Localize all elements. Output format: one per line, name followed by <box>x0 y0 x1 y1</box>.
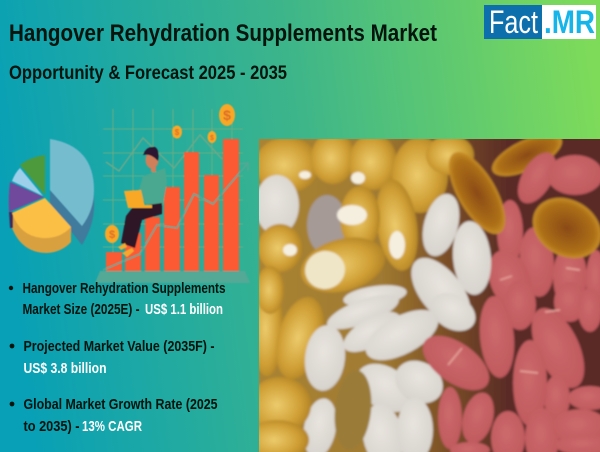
platform <box>95 271 250 283</box>
pie chart illustration <box>9 139 94 253</box>
coins <box>105 104 235 243</box>
growth bar chart illustration: $ <box>223 107 231 123</box>
bullet: growth rate: to 2035) - <box>24 418 80 435</box>
subtitle: Opportunity & Forecast 2025 - 2035 <box>9 62 287 84</box>
bullet: market size: Hangover Rehydration Supplements <box>22 280 226 297</box>
bullet: market size: Market Size (2025E) - <box>22 301 140 318</box>
photo of capsules and tablets <box>245 125 600 452</box>
growth bar chart illustration <box>95 104 250 283</box>
growth bar chart illustration: $ <box>175 128 180 137</box>
bullet: projected value: Projected Market Value (2035F) - <box>24 338 215 355</box>
bullet: growth rate: 13% CAGR <box>82 418 142 435</box>
red tablets, upper <box>488 151 600 304</box>
bullet: projected value <box>10 338 215 377</box>
chart grid <box>103 109 243 270</box>
red tablets, lower <box>413 280 600 452</box>
gold capsules, lower <box>259 376 312 452</box>
bars <box>106 139 239 271</box>
bullet: growth rate <box>10 396 217 435</box>
logo: Fact.MR: Fact <box>489 4 538 40</box>
gold capsules, top <box>255 132 474 213</box>
bullet: projected value: US$ 3.8 billion <box>24 360 106 377</box>
gold capsules, middle <box>259 180 419 379</box>
bullet: market size <box>9 280 225 318</box>
logo: Fact.MR <box>484 4 596 40</box>
growth bar chart illustration: $ <box>109 229 115 241</box>
person with laptop <box>118 147 167 257</box>
title: Hangover Rehydration Supplements Market <box>9 20 437 47</box>
growth arrow <box>103 163 248 270</box>
growth bar chart illustration: $ <box>210 135 214 142</box>
bullet list <box>9 280 225 435</box>
white tablets, lower <box>302 298 445 452</box>
zigzag line <box>106 135 222 171</box>
white tablets, top <box>255 175 494 339</box>
bullet: growth rate: Global Market Growth Rate (2025 <box>24 396 218 413</box>
highlights <box>448 268 580 373</box>
bullet: market size: US$ 1.1 billion <box>145 301 223 318</box>
